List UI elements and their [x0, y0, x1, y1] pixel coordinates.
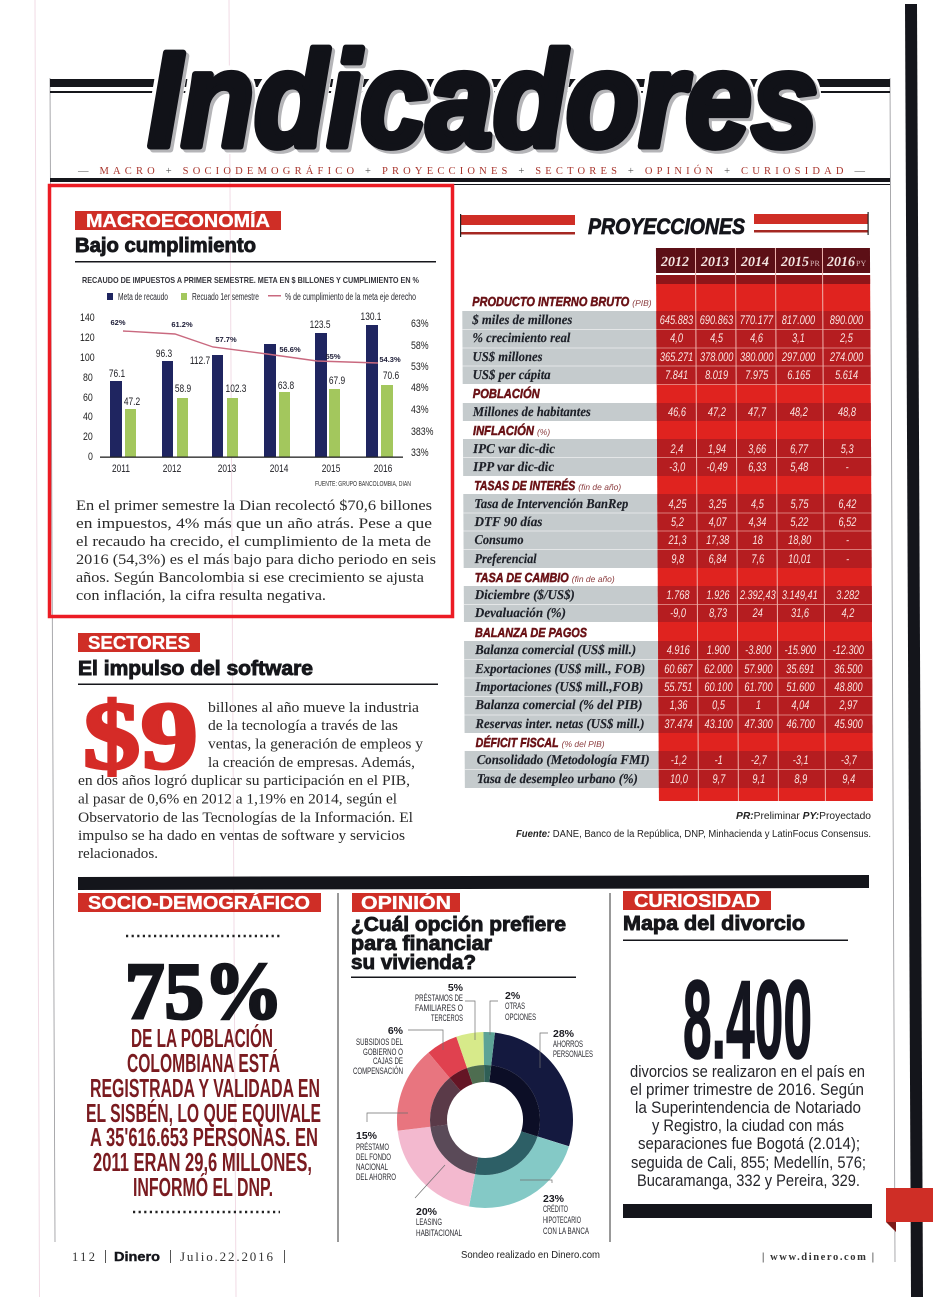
table values: 365.271 [660, 351, 693, 364]
table values: - [846, 534, 849, 547]
heading: el impulso del software: El impulso del software [78, 658, 313, 680]
table values: 18,80 [788, 534, 812, 547]
macro paragraph [76, 498, 436, 604]
table values: -3,0 [669, 461, 686, 474]
donut label: 5%: TERCEROS [431, 1013, 463, 1024]
table values: 18 [752, 534, 764, 547]
table body [462, 248, 873, 801]
chart title: RECAUDO DE IMPUESTOS A PRIMER SEMESTRE. META EN $ BILLONES Y CUMPLIMIENTO EN % [82, 275, 419, 285]
table values: 817.000 [782, 314, 816, 327]
table values: 46,6 [668, 406, 687, 419]
big number: 75%: 75% [125, 948, 283, 1036]
table values: 8,9 [794, 773, 807, 786]
socio-demográfico statement: REGISTRADA Y VALIDADA EN [90, 1073, 320, 1103]
table values: 45.900 [834, 718, 864, 731]
curiosidad paragraph: divorcios se realizaron en el país en [630, 1063, 865, 1081]
donut label: 23%: CON LA BANCA [543, 1226, 589, 1237]
table values: 31,6 [791, 607, 810, 620]
donut label: 5%: FAMILIARES O [415, 1003, 463, 1014]
row labels: Millones de habitantes [472, 404, 591, 419]
table values: 47,7 [748, 406, 767, 419]
table values: 1.900 [707, 644, 731, 657]
table values: 7,6 [751, 553, 765, 566]
panel: curiosidad [623, 891, 872, 1218]
socio-demográfico statement: DE LA POBLACIÓN [131, 1023, 273, 1053]
donut label: 28%: PERSONALES [553, 1049, 593, 1060]
bar chart: 2011 [112, 463, 130, 475]
table values: 770.177 [740, 314, 774, 327]
right black page bar [905, 4, 923, 1297]
opinión heading: su vivienda? [351, 952, 476, 974]
opinión heading: para financiar [351, 933, 492, 955]
table values: 3,1 [792, 332, 805, 345]
table values: 2,4 [670, 443, 683, 456]
table values: 8.019 [705, 369, 728, 382]
row labels: IPP var dic-dic [472, 459, 554, 474]
bar chart: 56.6% [279, 345, 301, 354]
macro paragraph: años. Según Bancolombia si ese crecimiento se ajusta [76, 570, 424, 586]
row labels: DTF 90 días [473, 514, 542, 529]
table header: 2016 [826, 255, 855, 270]
table values: 1,94 [708, 443, 726, 456]
sectores paragraph: Observatorio de las Tecnologías de la Información. El [78, 810, 413, 826]
donut label: 6%: 6% [388, 1025, 404, 1037]
sectores paragraph: al pasar de 0,6% en 2012 a 1,19% en 2014, según el [78, 792, 397, 808]
donut label: 15%: DEL AHORRO [356, 1172, 396, 1183]
table footnotes: Fuente: DANE, Banco de la República, DNP, Minhacienda y LatinFocus Consensus. [516, 829, 871, 840]
footer: | www.dinero.com | [762, 1252, 874, 1263]
chart legend: Meta de recaudo [118, 292, 168, 303]
footer: Sondeo realizado en Dinero.com [461, 1249, 600, 1261]
table values: 35.691 [786, 663, 814, 676]
row labels [471, 312, 650, 786]
bar chart: 100 [80, 352, 95, 364]
curiosidad paragraph: Bucaramanga, 332 y Pereira, 329. [637, 1172, 860, 1190]
donut label: 6%: CAJAS DE [373, 1056, 403, 1067]
sectores paragraph [78, 700, 424, 862]
table values: 37.474 [664, 718, 693, 731]
proyecciones heading [460, 212, 869, 239]
table values: 17,38 [706, 534, 730, 547]
sectores tag: SECTORES [88, 633, 190, 653]
macroeconomía tag: MACROECONOMÍA [86, 210, 270, 231]
table values: 43.100 [704, 718, 734, 731]
table values: -0,49 [707, 461, 728, 474]
sectores paragraph: relacionados. [78, 846, 158, 862]
socio-demográfico statement: A 35'616.653 PERSONAS. EN [90, 1122, 318, 1152]
sectores paragraph: la creación de empresas. Además, [208, 755, 415, 771]
bar chart: 58.9 [175, 383, 191, 395]
table values: 8,73 [709, 607, 728, 620]
bar chart: 76.1 [109, 368, 125, 380]
bar chart [80, 311, 434, 475]
donut label: 6%: COMPENSACIÓN [353, 1066, 403, 1077]
row labels: US$ per cápita [473, 367, 551, 382]
table values: 890.000 [830, 314, 864, 327]
bar chart: 60 [83, 392, 93, 404]
table values: 51.600 [786, 681, 815, 694]
table values: 378.000 [700, 351, 734, 364]
curiosidad paragraph: el primer trimestre de 2016. Según [630, 1081, 864, 1099]
bar chart: 96.3 [156, 348, 172, 360]
table values: 48,2 [790, 406, 808, 419]
donut label: 28% [553, 1028, 593, 1060]
table values: 6.165 [787, 369, 811, 382]
donut label: 23% [543, 1193, 589, 1237]
curiosidad paragraph: separaciones fue Bogotá (2.014); [638, 1135, 860, 1153]
bar chart: 2016 [374, 463, 392, 475]
table values: 0,5 [712, 699, 726, 712]
bar chart: 383% [411, 426, 434, 438]
donut label: 23%: 23% [543, 1193, 565, 1205]
table values: 1,36 [670, 699, 688, 712]
projections table [462, 248, 873, 801]
row labels: Importaciones (US$ mill.,FOB) [474, 679, 643, 694]
table values: 4,5 [751, 498, 765, 511]
masthead: Indicadores: Indicadores [151, 27, 821, 178]
heading: bajo cumplimiento: Bajo cumplimiento [75, 235, 256, 257]
donut label: 2% [505, 990, 536, 1023]
panel: macroeconomía [50, 186, 452, 616]
bar chart: 2012 [163, 463, 181, 475]
table values: 4,04 [791, 699, 809, 712]
section labels: (% del PIB) [562, 739, 605, 749]
curiosidad tag: CURIOSIDAD [634, 891, 760, 911]
bar chart: 102.3 [226, 383, 246, 395]
donut label: 15%: PRÉSTAMO [356, 1142, 389, 1153]
donut label: 20%: LEASING [416, 1217, 442, 1228]
table header: 2012 [660, 255, 689, 270]
table values: 60.100 [704, 681, 733, 694]
table values: 9,1 [752, 773, 765, 786]
row labels: Balanza comercial (% del PIB) [474, 697, 642, 712]
sectores paragraph: impulso se ha dado en ventas de software y servicios [78, 828, 405, 844]
donut label: 5% [415, 982, 464, 1024]
table values: 4,5 [710, 332, 724, 345]
row labels: Exportaciones (US$ mill., FOB) [474, 661, 645, 676]
section labels: TASAS DE INTERÉS [474, 478, 576, 493]
table values: 61.700 [744, 681, 773, 694]
macro paragraph: en impuestos, 4% más que un año atrás. Pese a que [76, 516, 432, 532]
table values: 4,6 [750, 332, 764, 345]
donut label: 15%: 15% [356, 1130, 378, 1142]
bar chart: 140 [80, 312, 95, 324]
red highlight frame [50, 186, 452, 616]
section labels: TASA DE CAMBIO [475, 570, 569, 585]
table values: 5,22 [790, 516, 808, 529]
table values: 47,2 [708, 406, 726, 419]
table values: 3.149,41 [782, 589, 818, 602]
footer: Julio.22.2016 [180, 1249, 274, 1264]
socio-demográfico tag: SOCIO-DEMOGRÁFICO [88, 892, 310, 913]
donut label: 5%: 5% [448, 982, 464, 994]
table values: -3,7 [841, 754, 858, 767]
donut chart [384, 1019, 586, 1221]
bar chart: 47.2 [124, 396, 140, 408]
section labels [472, 294, 654, 750]
curiosidad paragraph: seguida de Cali, 855; Medellín, 576; [631, 1154, 866, 1172]
bar chart: 63% [411, 318, 429, 330]
panel: proyecciones [460, 212, 873, 840]
donut label: 15%: NACIONAL [356, 1162, 388, 1173]
footer: Dinero [114, 1249, 160, 1264]
table values: 57.900 [744, 663, 773, 676]
curiosidad paragraph: y Registro, la ciudad con más [652, 1117, 844, 1135]
footer: 112 [72, 1250, 95, 1264]
bar chart: 2015 [322, 463, 341, 475]
table values: 60.667 [664, 663, 693, 676]
table values: 48,8 [838, 406, 857, 419]
donut label: 6% [353, 1025, 404, 1077]
section labels: BALANZA DE PAGOS [475, 625, 587, 640]
table values: 274.000 [829, 351, 864, 364]
table values: 55.751 [664, 681, 692, 694]
bar chart: 62% [110, 318, 126, 327]
socio-demográfico statement: EL SISBÉN, LO QUE EQUIVALE [86, 1098, 321, 1128]
row labels: Consolidado (Metodología FMI) [477, 752, 650, 767]
macro paragraph: 2016 (54,3%) es el más bajo para dicho periodo en seis [76, 552, 436, 568]
bar chart: 2014 [270, 463, 289, 475]
opinión heading: ¿Cuál opción prefiere [351, 914, 566, 936]
table values: 9,7 [712, 773, 726, 786]
table values: 47.300 [744, 718, 774, 731]
bar chart: 112.7 [190, 355, 210, 367]
section labels: PRODUCTO INTERNO BRUTO [472, 294, 629, 309]
opinión tag: OPINIÓN [361, 892, 451, 913]
masthead: Indicadores: Indicadores [148, 24, 818, 175]
curiosidad paragraph: la Superintendencia de Notariado [635, 1099, 861, 1117]
table values: -1 [715, 754, 723, 767]
bar chart: 55% [325, 352, 341, 361]
table values: 62.000 [704, 663, 733, 676]
table values: 4,25 [668, 498, 687, 511]
donut label: 20%: HABITACIONAL [416, 1228, 462, 1239]
table header [656, 248, 870, 273]
table values: 48.800 [834, 681, 863, 694]
table values: 2,5 [839, 332, 854, 345]
table header: 2014 [740, 255, 769, 270]
bar chart: 2013 [218, 463, 236, 475]
subtitle strip: — MACRO + SOCIODEMOGRÁFICO + PROYECCIONES + SECTORES + OPINIÓN + CURIOSIDAD — [77, 165, 865, 177]
table values: 10,01 [788, 553, 811, 566]
heading: mapa del divorcio: Mapa del divorcio [623, 913, 805, 935]
sectores paragraph: billones al año mueve la industria [208, 700, 419, 716]
row labels: Reservas inter. netas (US$ mill.) [475, 716, 645, 731]
bar chart: 0 [88, 451, 93, 463]
bar chart: 130.1 [361, 311, 381, 323]
bar chart: 70.6 [383, 370, 399, 382]
table values: 5,3 [841, 443, 854, 456]
macro paragraph: con inflación, la cifra resulta negativa. [76, 588, 326, 604]
donut label: 6%: GOBIERNO O [363, 1047, 403, 1058]
sectores paragraph: ventas, la generación de empleos y [208, 736, 424, 752]
section labels: (%) [537, 427, 550, 437]
sectores paragraph: en dos años logró duplicar su participación en el PIB, [78, 773, 410, 789]
table footnotes: PR:Preliminar PY:Proyectado [736, 811, 871, 822]
table header: PY [856, 259, 866, 268]
chart legend: Recuado 1er semestre [192, 292, 259, 303]
socio-demográfico statement: 2011 ERAN 29,6 MILLONES, [93, 1147, 312, 1177]
row labels: IPC var dic-dic [472, 441, 555, 456]
table values: 4,07 [709, 516, 727, 529]
bar chart: 33% [411, 447, 429, 459]
bar chart: 61.2% [171, 320, 193, 329]
bar chart: 63.8 [278, 380, 294, 392]
table values: 3,25 [708, 498, 727, 511]
table header: PR [810, 259, 820, 268]
table values: 6,33 [748, 461, 767, 474]
table values: 380.000 [740, 351, 774, 364]
table values: 46.700 [786, 718, 816, 731]
donut label: 15%: DEL FONDO [356, 1152, 391, 1163]
table values: -1,2 [671, 754, 687, 767]
donut label: 15% [356, 1130, 396, 1183]
section labels: (fin de año) [572, 574, 615, 584]
donut label: 2%: OPCIONES [505, 1012, 536, 1023]
bar chart: 20 [83, 431, 93, 443]
chart source: FUENTE: GRUPO BANCOLOMBIA, DIAN [315, 479, 411, 488]
table values: 3,66 [748, 443, 767, 456]
row labels: Preferencial [475, 551, 537, 566]
row labels: US$ millones [472, 349, 543, 364]
row labels: Balanza comercial (US$ mill.) [474, 642, 636, 657]
donut label: 2%: OTRAS [505, 1001, 525, 1012]
table values: 9,8 [671, 553, 685, 566]
table values: 6,52 [838, 516, 856, 529]
table values: 5,2 [671, 516, 684, 529]
footer [72, 1249, 874, 1264]
bar chart: 67.9 [329, 375, 345, 387]
masthead: Indicadores: Indicadores [148, 24, 818, 175]
donut label: 2%: 2% [505, 990, 521, 1002]
bar chart: 53% [411, 361, 429, 373]
donut label: 20% [416, 1206, 462, 1239]
donut label: 28%: AHORROS [553, 1039, 583, 1050]
table values: 5,48 [790, 461, 809, 474]
table values: 9,4 [842, 773, 855, 786]
socio-demográfico statement [86, 1023, 321, 1202]
socio-demográfico statement: INFORMÓ EL DNP. [133, 1172, 273, 1202]
chart legend [107, 292, 416, 303]
table values: - [846, 553, 850, 566]
section labels: POBLACIÓN [473, 386, 540, 401]
table values: - [846, 461, 849, 474]
table values: -2,7 [751, 754, 768, 767]
table values: 2.392,43 [739, 589, 777, 602]
row labels: Tasa de Intervención BanRep [474, 496, 629, 511]
sectores paragraph: de la tecnología a través de las [208, 718, 398, 734]
row labels: Tasa de desempleo urbano (%) [477, 771, 638, 786]
table values: 3.282 [836, 589, 859, 602]
macro paragraph: En el primer semestre la Dian recolectó $70,6 billones [76, 498, 432, 514]
macro paragraph: el recaudo ha crecido, el cumplimiento de la meta de [76, 534, 431, 550]
table values: 4,0 [670, 332, 684, 345]
table values: -12.300 [833, 644, 865, 657]
bar chart: 54.3% [379, 355, 401, 364]
bar chart: 58% [411, 340, 429, 352]
opinión heading [351, 914, 566, 974]
table values: 5.614 [835, 369, 858, 382]
table values: 7.975 [745, 369, 769, 382]
table values: 6,84 [709, 553, 727, 566]
table values: -3,1 [793, 754, 809, 767]
table values: 10,0 [670, 773, 689, 786]
donut label: 20%: 20% [416, 1206, 438, 1218]
table values: 1 [756, 699, 761, 712]
opinión tag [352, 892, 460, 913]
table values: 21,3 [668, 534, 687, 547]
socio-demográfico statement: COLOMBIANA ESTÁ [127, 1048, 280, 1078]
table values: 7.841 [665, 369, 688, 382]
table header: 2015 [780, 255, 809, 270]
table values [660, 314, 866, 786]
table values: 36.500 [834, 663, 863, 676]
table values: 645.883 [660, 314, 694, 327]
bar chart: 80 [83, 372, 93, 384]
section labels: (fin de año) [578, 482, 621, 492]
table values: 4,34 [748, 516, 766, 529]
table values: 5,75 [790, 498, 809, 511]
panel: socio-demográfico [78, 892, 321, 1212]
table values: 4,2 [841, 607, 854, 620]
table header: 2013 [700, 255, 729, 270]
table values: 2,97 [839, 699, 858, 712]
section labels: DÉFICIT FISCAL [476, 735, 559, 750]
curiosidad paragraph [630, 1063, 866, 1190]
row labels: $ miles de millones [471, 312, 572, 327]
bar chart: 48% [411, 382, 429, 394]
table values: 6,42 [838, 498, 856, 511]
donut label: 6%: SUBSIDIOS DEL [356, 1037, 403, 1048]
row labels: Devaluación (%) [474, 605, 566, 620]
row labels: Consumo [474, 532, 524, 547]
row labels: % crecimiento real [472, 330, 571, 345]
table values: 1.926 [706, 589, 730, 602]
table values: 297.000 [781, 351, 816, 364]
bar chart: 40 [83, 411, 93, 423]
proyecciones heading: PROYECCIONES [588, 214, 745, 239]
bar chart: 57.7% [215, 335, 237, 344]
donut label: 23%: CRÉDITO [543, 1204, 568, 1215]
bar chart: 43% [411, 404, 429, 416]
grey row bands [462, 311, 659, 788]
bar chart: 120 [80, 332, 95, 344]
row labels: Diciembre ($/US$) [474, 587, 575, 602]
donut label: 28%: 28% [553, 1028, 575, 1040]
donut label: 5%: PRÉSTAMOS DE [415, 993, 463, 1004]
table values: -3.800 [745, 644, 772, 657]
chart legend: % de cumplimiento de la meta eje derecho [285, 292, 416, 303]
table footnotes [516, 811, 871, 840]
table values: 4.916 [667, 644, 691, 657]
table values: 690.863 [700, 314, 734, 327]
panel: sectores [78, 633, 438, 862]
section labels: INFLACIÓN [473, 423, 534, 438]
table values: -9,0 [670, 607, 687, 620]
panel: opinión [351, 892, 593, 1239]
red corner tab [886, 1188, 933, 1232]
bar chart: 123.5 [310, 319, 331, 331]
big number: $9: $9 [83, 682, 198, 789]
table values: 6,77 [790, 443, 809, 456]
donut label: 23%: HIPOTECARIO [543, 1215, 581, 1226]
table values: -15.900 [785, 644, 817, 657]
table values: 24 [752, 607, 763, 620]
section labels: (PIB) [632, 298, 652, 308]
table values: 1.768 [666, 589, 690, 602]
